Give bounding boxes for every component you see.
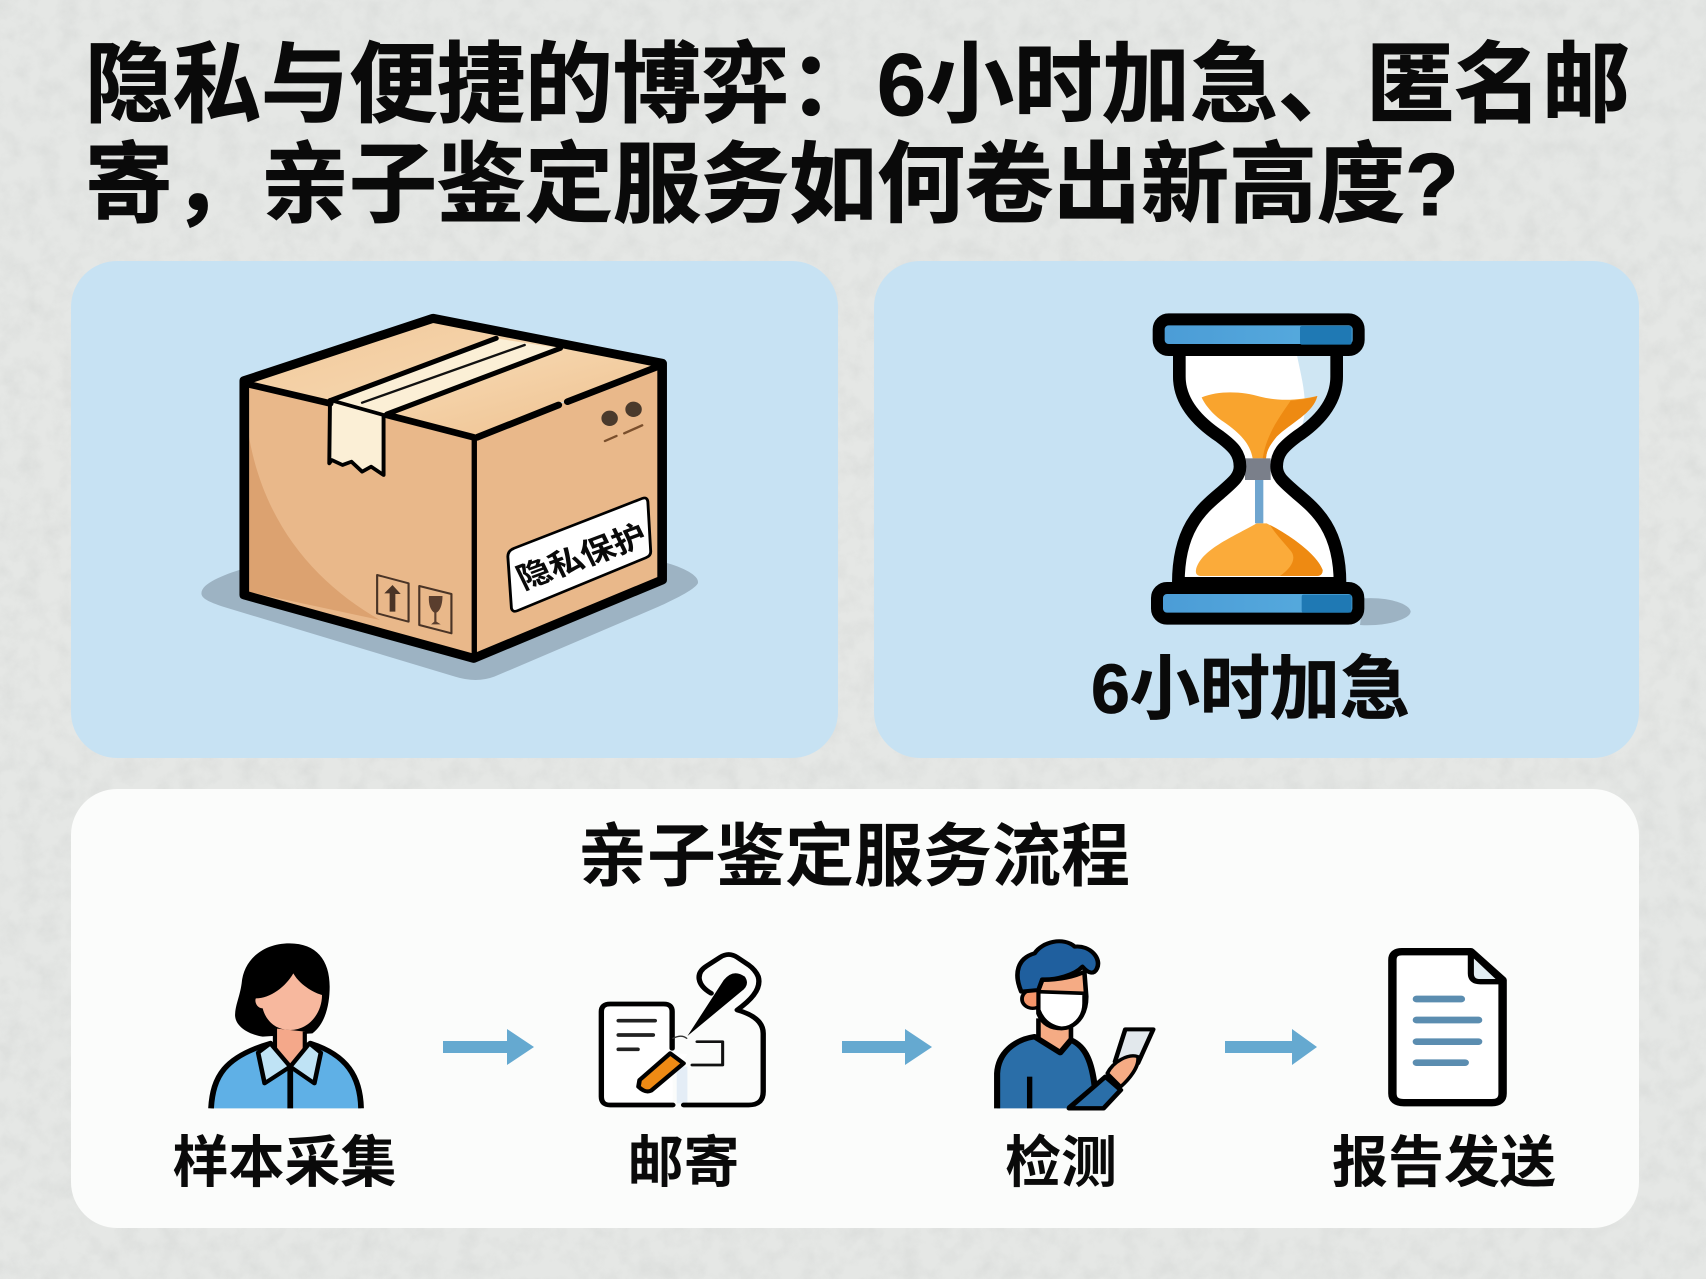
- icon: sealed cardboard box: [201, 318, 698, 680]
- arrow: [842, 1029, 932, 1065]
- label: testing: 检测: [1005, 1131, 1117, 1194]
- label: privacy protection sticker: [508, 498, 653, 611]
- label: 6 hour express: 6小时加急: [1091, 650, 1410, 728]
- arrow: [443, 1029, 534, 1065]
- panel: service process: [71, 789, 1639, 1228]
- panel: privacy parcel: [71, 261, 838, 758]
- panel: 6 hour express: [874, 261, 1639, 758]
- icon: lab tester with mask: [997, 941, 1153, 1108]
- icon: hourglass: [1157, 319, 1411, 625]
- label: report delivery: 报告发送: [1332, 1131, 1556, 1194]
- label: mailing: 邮寄: [628, 1131, 740, 1194]
- arrow: [1225, 1029, 1317, 1065]
- title: 寄，亲子鉴定服务如何卷出新高度?: [85, 135, 1459, 234]
- heading: process: 亲子鉴定服务流程: [578, 818, 1130, 895]
- icon: report document: [1392, 952, 1503, 1103]
- label: sample collection: 样本采集: [172, 1131, 396, 1194]
- title: 隐私与便捷的博弈：6小时加急、匿名邮: [85, 35, 1630, 134]
- icon: mailing kit: [601, 954, 763, 1105]
- title: [85, 35, 1630, 234]
- label: privacy protection sticker: 隐私保护: [511, 518, 653, 596]
- icon: sample collection person: [211, 943, 361, 1108]
